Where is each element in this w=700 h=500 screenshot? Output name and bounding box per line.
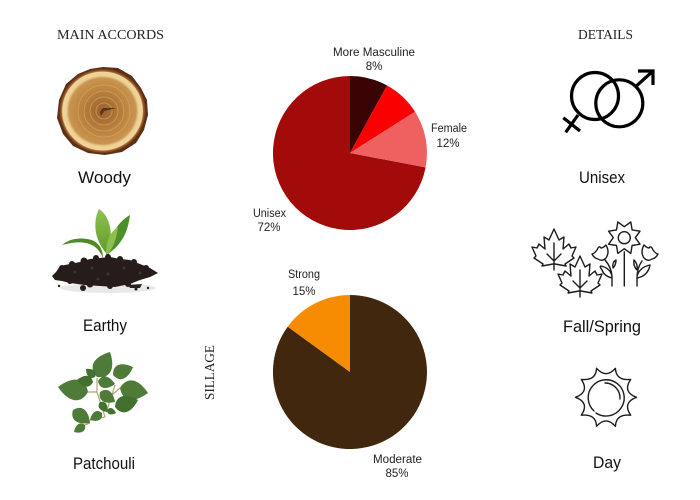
value: 8%: 8%: [366, 61, 382, 73]
label: More Masculine: More Masculine: [333, 47, 415, 59]
label: Unisex: Unisex: [253, 208, 286, 220]
value: 85%: 85%: [385, 468, 409, 480]
icon: sun: [576, 368, 636, 426]
icon: leaves and flowers: [532, 222, 658, 297]
label: Patchouli: Patchouli: [73, 455, 135, 473]
value: 72%: 72%: [257, 222, 281, 234]
label: Fall/Spring: Fall/Spring: [563, 318, 641, 336]
label: Earthy: Earthy: [83, 317, 128, 335]
icon: patchouli sprig: [56, 348, 150, 436]
slice: More Masculine 8%: [350, 76, 387, 153]
slice: red 8%: [350, 86, 415, 153]
heading: details: DETAILS: [578, 28, 633, 43]
icon: gender symbols: [563, 71, 653, 132]
chart: sillage pie: [273, 269, 427, 480]
label: Unisex: Unisex: [579, 169, 626, 187]
slice: Strong 15%: [288, 295, 350, 372]
slice: Female 12%: [350, 112, 427, 167]
chart: gender pie: [253, 47, 467, 234]
icon: wood slice: [57, 67, 148, 155]
label: Woody: Woody: [78, 169, 132, 187]
heading: sillage: SILLAGE: [203, 345, 218, 400]
slice: Moderate 85%: [273, 295, 427, 449]
icon: seedling in soil: [52, 209, 158, 293]
label: Strong: Strong: [288, 269, 320, 281]
value: 15%: 15%: [292, 286, 316, 298]
slice: Unisex 72%: [273, 76, 426, 230]
label: Moderate: Moderate: [373, 454, 422, 466]
label: Female: Female: [431, 123, 467, 135]
value: 12%: 12%: [436, 138, 460, 150]
label: Day: Day: [593, 454, 622, 472]
heading: main accords: MAIN ACCORDS: [57, 28, 164, 43]
